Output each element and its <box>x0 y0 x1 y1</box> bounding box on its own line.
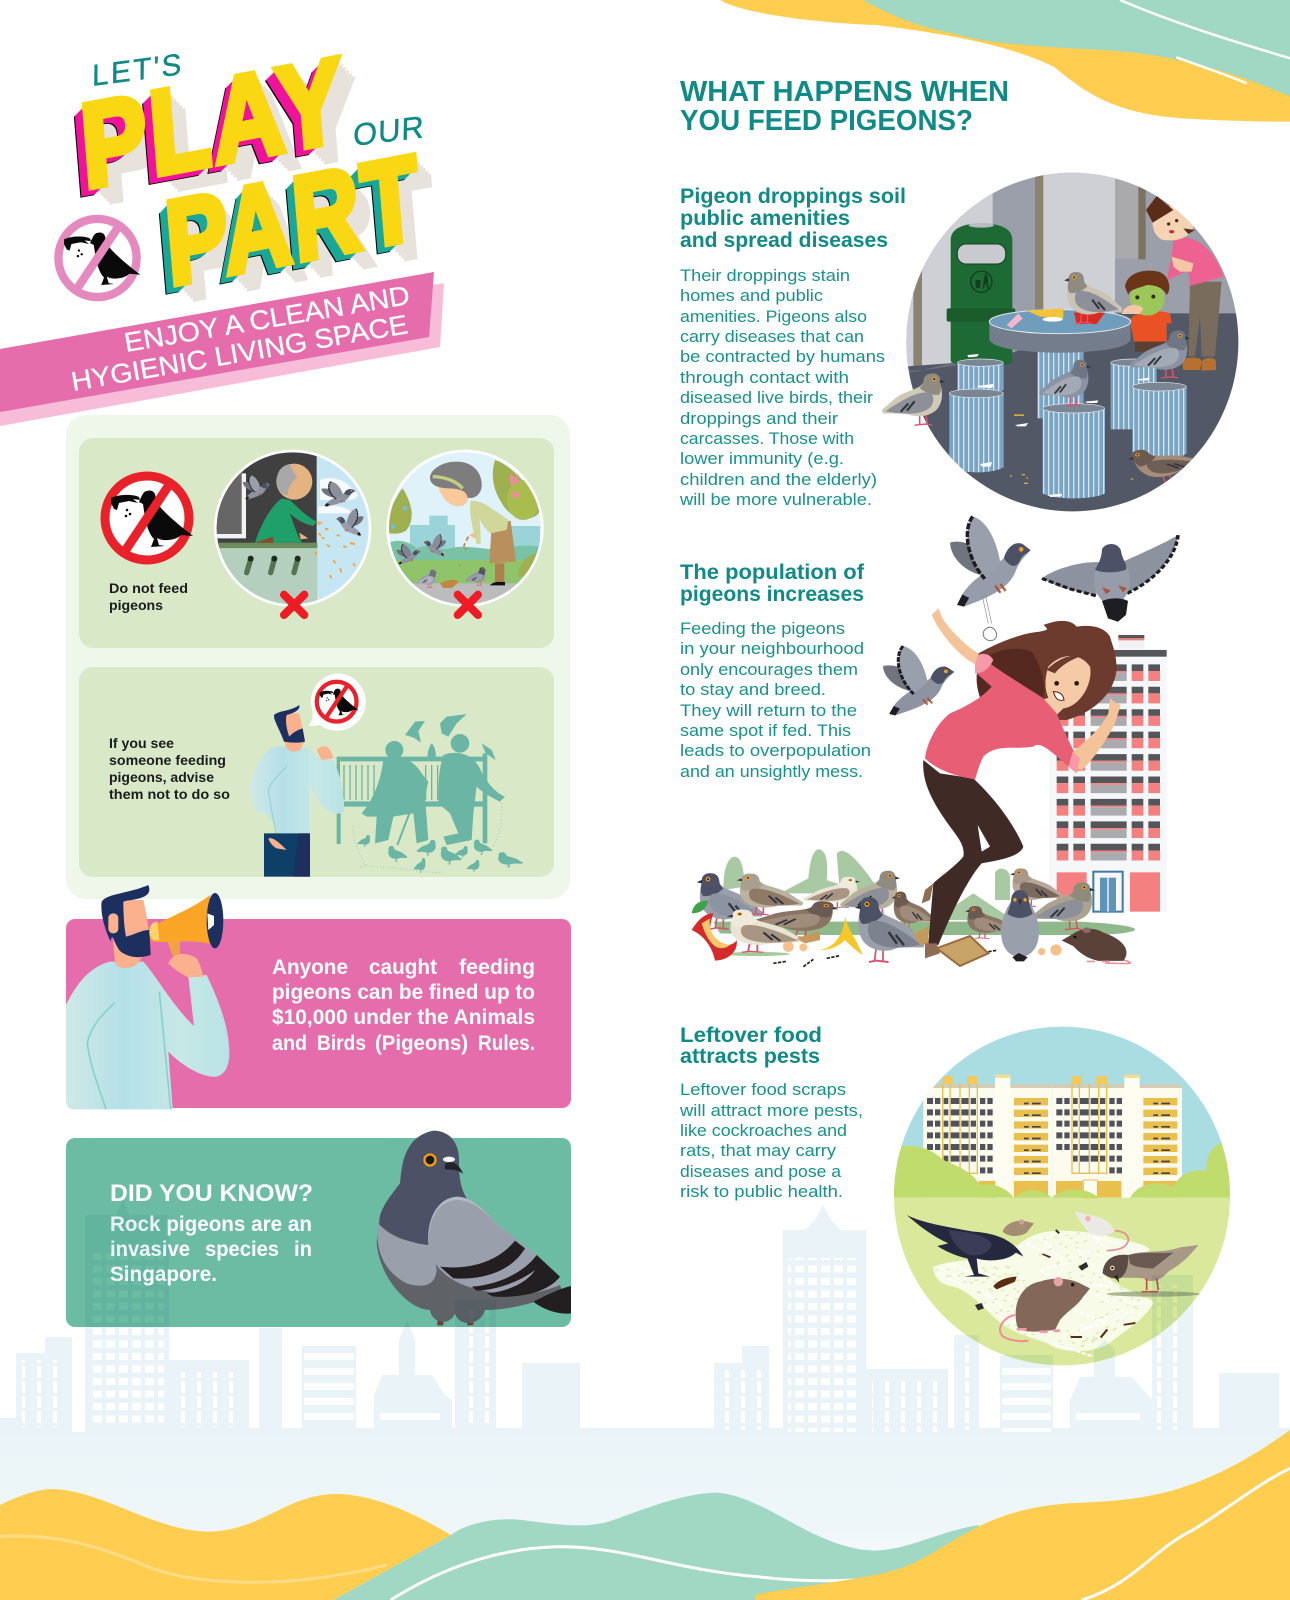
section heading: droppings <box>680 184 906 252</box>
text: do not feed pigeons: Do not feed <box>109 580 188 596</box>
text: fine warning: (Pigeons) <box>375 1032 468 1055</box>
section heading: population: The population of <box>680 560 865 584</box>
body text: droppings: carcasses. Those with <box>680 429 854 448</box>
stools <box>949 352 1187 498</box>
section heading: droppings: Pigeon droppings soil <box>680 184 906 208</box>
text: fine warning: Birds <box>317 1032 366 1055</box>
text: did you know: invasive <box>110 1238 190 1261</box>
illustration: large pigeon <box>377 1131 571 1325</box>
mark: red cross <box>458 595 478 615</box>
body text: droppings: carry diseases that can <box>680 327 864 346</box>
title word: PLAY: PLAY <box>76 32 351 214</box>
header banner: enjoy a clean and hygienic living space: ENJOY A CLEAN AND <box>122 280 412 358</box>
text: if you see someone feeding: pigeons, advise <box>109 769 214 785</box>
flock on ground <box>692 868 1130 967</box>
section heading: droppings: public amenities <box>680 206 850 230</box>
illustration: man advising seated people <box>250 673 523 877</box>
mouse: white <box>1075 1211 1128 1251</box>
insects <box>975 1229 1135 1338</box>
mouse: brown <box>1003 1219 1034 1236</box>
woman <box>1146 196 1223 371</box>
panel: did you know <box>66 1138 571 1327</box>
body text: population: and an unsightly mess. <box>680 762 863 781</box>
text: do not feed pigeons <box>109 580 188 613</box>
silhouette: bench with people and birds <box>337 714 523 873</box>
text: fine warning: feeding <box>459 956 535 979</box>
icon: red no feeding sign <box>104 475 193 561</box>
woman <box>922 608 1121 958</box>
body text: droppings: children and the elderly) <box>680 470 877 489</box>
section heading: pests <box>680 1023 822 1068</box>
body text: droppings: Their droppings stain <box>680 266 850 285</box>
body text: pests: diseases and pose a <box>680 1162 842 1181</box>
illustration: leftover food and pests scene <box>890 1023 1237 1371</box>
body text: droppings: diseased live birds, their <box>680 388 873 407</box>
body text: droppings: homes and public <box>680 286 824 305</box>
header banner: enjoy a clean and hygienic living space: HYGIENIC LIVING SPACE <box>69 309 410 397</box>
text: fine warning: pigeons can be fined up to <box>272 981 535 1004</box>
illustration: pigeon population scene <box>692 516 1178 967</box>
heading: what happens when you feed pigeons: YOU FEED PIGEONS? <box>680 105 973 137</box>
decorative wave: bottom <box>0 1430 1290 1600</box>
decorative wave: top right <box>720 0 1290 122</box>
rice pile <box>933 1231 1153 1357</box>
section heading: droppings: and spread diseases <box>680 228 888 252</box>
text: did you know: DID YOU KNOW? <box>110 1180 313 1207</box>
text: did you know: in <box>294 1238 312 1261</box>
text: if you see someone feeding: them not to do so <box>109 786 230 802</box>
flats <box>923 1075 1182 1198</box>
text: fine warning: Anyone <box>272 956 348 979</box>
text: do not feed pigeons: pigeons <box>109 597 163 613</box>
text: if you see someone feeding: If you see <box>109 735 174 751</box>
person: man <box>250 705 344 877</box>
panel: what you can do <box>66 415 570 899</box>
text: if you see someone feeding: someone feeding <box>109 752 226 768</box>
section heading: population: pigeons increases <box>680 582 864 606</box>
flying pigeons <box>883 516 1178 715</box>
crow <box>907 1215 1023 1277</box>
body text: droppings: through contact with <box>680 368 849 387</box>
body text: population: same spot if fed. This <box>680 721 851 740</box>
section heading: pests: Leftover food <box>680 1023 822 1047</box>
body text: population <box>680 619 871 781</box>
mark: red cross <box>284 595 304 615</box>
section heading: pests: attracts pests <box>680 1044 820 1068</box>
body text: population: leads to overpopulation <box>680 741 871 760</box>
body text: pests <box>679 1080 863 1201</box>
body text: pests: will attract more pests, <box>679 1101 863 1120</box>
header banner: enjoy a clean and hygienic living space <box>0 272 444 426</box>
text: fine warning <box>272 956 535 1055</box>
title word: OUR: OUR <box>353 109 424 153</box>
section heading: population <box>680 560 865 606</box>
speech bubble with no feeding sign <box>308 673 366 731</box>
panel: fine warning <box>66 919 571 1108</box>
illustration: pigeon droppings scene <box>882 170 1243 513</box>
table <box>989 308 1131 353</box>
illustration: woman feeding pigeons in park <box>386 450 544 615</box>
title word: PART: PART <box>161 130 427 311</box>
building <box>1049 635 1167 912</box>
body text: droppings: be contracted by humans <box>680 347 885 366</box>
rat <box>1000 1277 1090 1341</box>
cityscape backdrop <box>0 1200 1290 1600</box>
body text: pests: rats, that may carry <box>680 1141 837 1160</box>
body text: population: Feeding the pigeons <box>680 619 845 638</box>
text: fine warning: caught <box>369 956 437 979</box>
text: did you know: species <box>205 1238 279 1261</box>
body text: population: only encourages them <box>680 660 858 679</box>
body text: population: in your neighbourhood <box>680 639 864 658</box>
body text: pests: Leftover food scraps <box>680 1080 846 1099</box>
pigeon <box>1103 1245 1200 1297</box>
body text: pests: like cockroaches and <box>680 1121 847 1140</box>
ground and silhouettes <box>713 849 1135 956</box>
body text: droppings: droppings and their <box>680 409 838 428</box>
droppings falling <box>982 593 992 623</box>
icon: pink no feeding sign <box>58 218 140 298</box>
body text: pests: risk to public health. <box>680 1182 843 1201</box>
text: did you know: Singapore. <box>110 1263 217 1286</box>
illustration: man with megaphone <box>66 885 229 1109</box>
body text: population: They will return to the <box>680 701 857 720</box>
text: if you see someone feeding <box>109 735 230 802</box>
body text: droppings: amenities. Pigeons also <box>680 307 867 326</box>
body text: population: to stay and breed. <box>680 680 826 699</box>
heading: what happens when you feed pigeons <box>680 76 1009 137</box>
text: fine warning: $10,000 under the Animals <box>272 1006 535 1029</box>
trash bin <box>947 223 1015 366</box>
body text: droppings: will be more vulnerable. <box>679 490 872 509</box>
body text: droppings: lower immunity (e.g. <box>680 449 844 468</box>
text: fine warning: and <box>272 1032 307 1055</box>
text: fine warning: Rules. <box>478 1032 535 1055</box>
boy <box>1122 271 1172 352</box>
text: did you know <box>110 1180 313 1286</box>
body text: droppings <box>679 266 885 509</box>
title word: LET'S: LET'S <box>92 48 181 93</box>
illustration: man feeding pigeons from window <box>213 450 373 615</box>
text: did you know: Rock pigeons are an <box>110 1213 312 1236</box>
heading: what happens when you feed pigeons: WHAT HAPPENS WHEN <box>680 76 1009 108</box>
